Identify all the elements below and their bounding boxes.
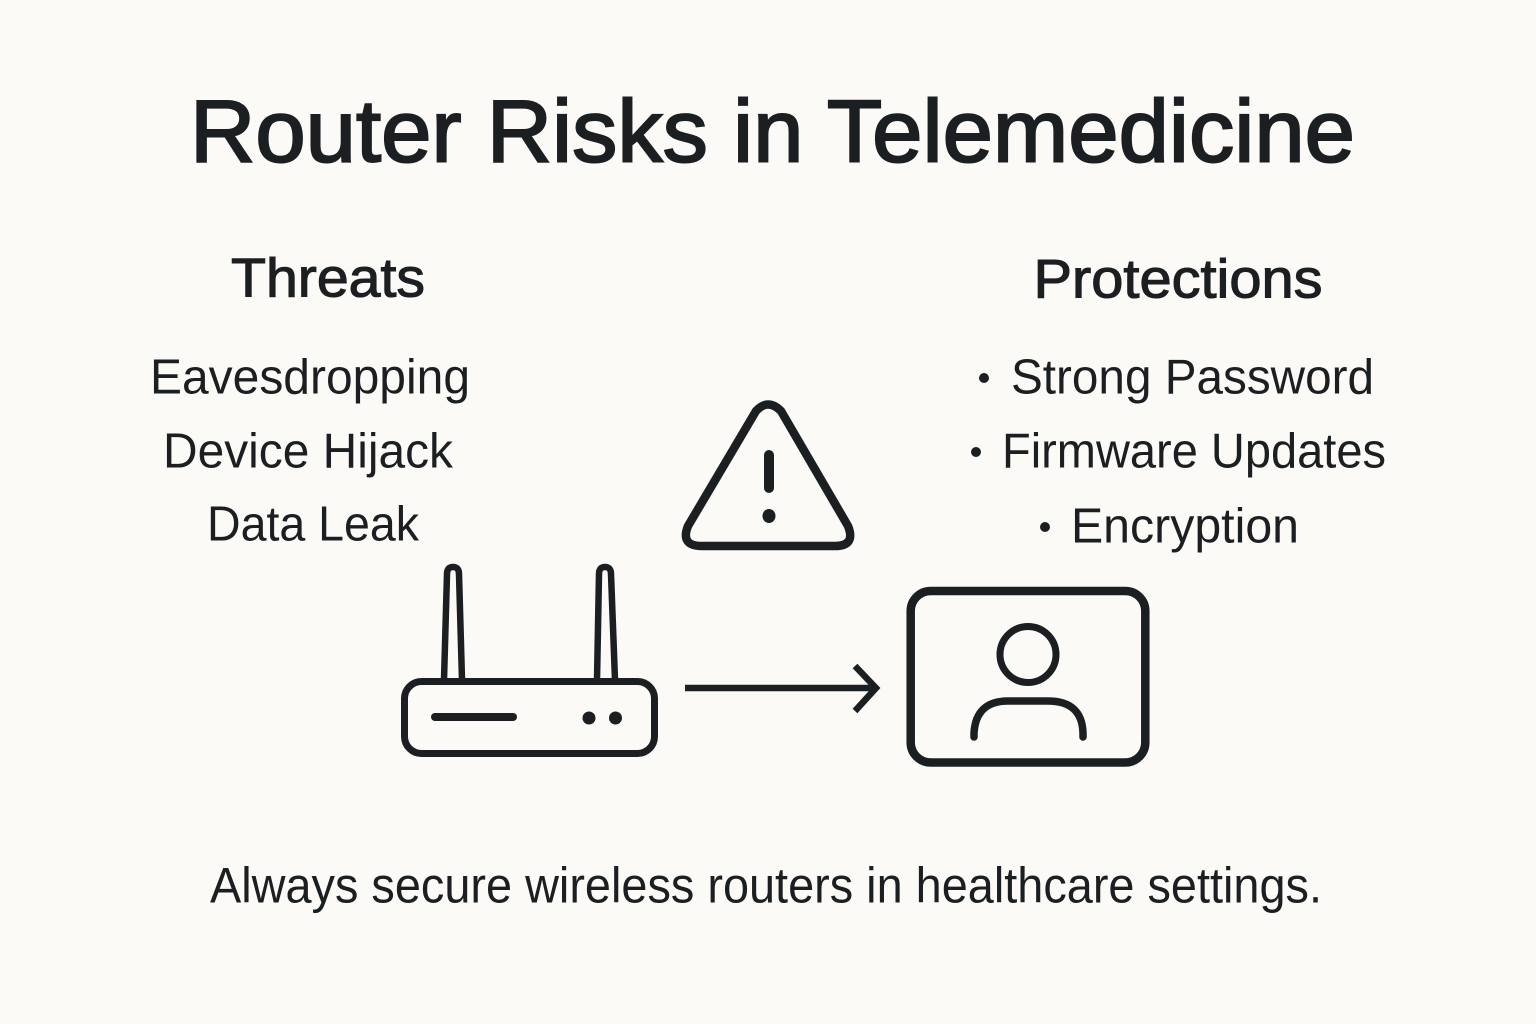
threats list: Eavesdropping [150,350,470,404]
icon: router [404,567,654,754]
protections list [971,350,1386,554]
protections list: Firmware Updates [1002,424,1386,478]
protections list: Strong Password [1011,350,1374,404]
threats list [150,350,470,552]
heading: protections: Protections [1034,248,1322,310]
threats list: Data Leak [207,498,419,552]
protections list: Encryption [1071,500,1299,554]
arrow [685,666,876,711]
icon: telehealth screen [911,591,1145,762]
title: Router Risks in Telemedicine [190,82,1355,180]
threats list: Device Hijack [163,424,453,478]
icon: warning triangle [686,404,850,546]
footer text: Always secure wireless routers in healthcare settings. [210,858,1322,914]
heading: threats: Threats [231,246,425,308]
